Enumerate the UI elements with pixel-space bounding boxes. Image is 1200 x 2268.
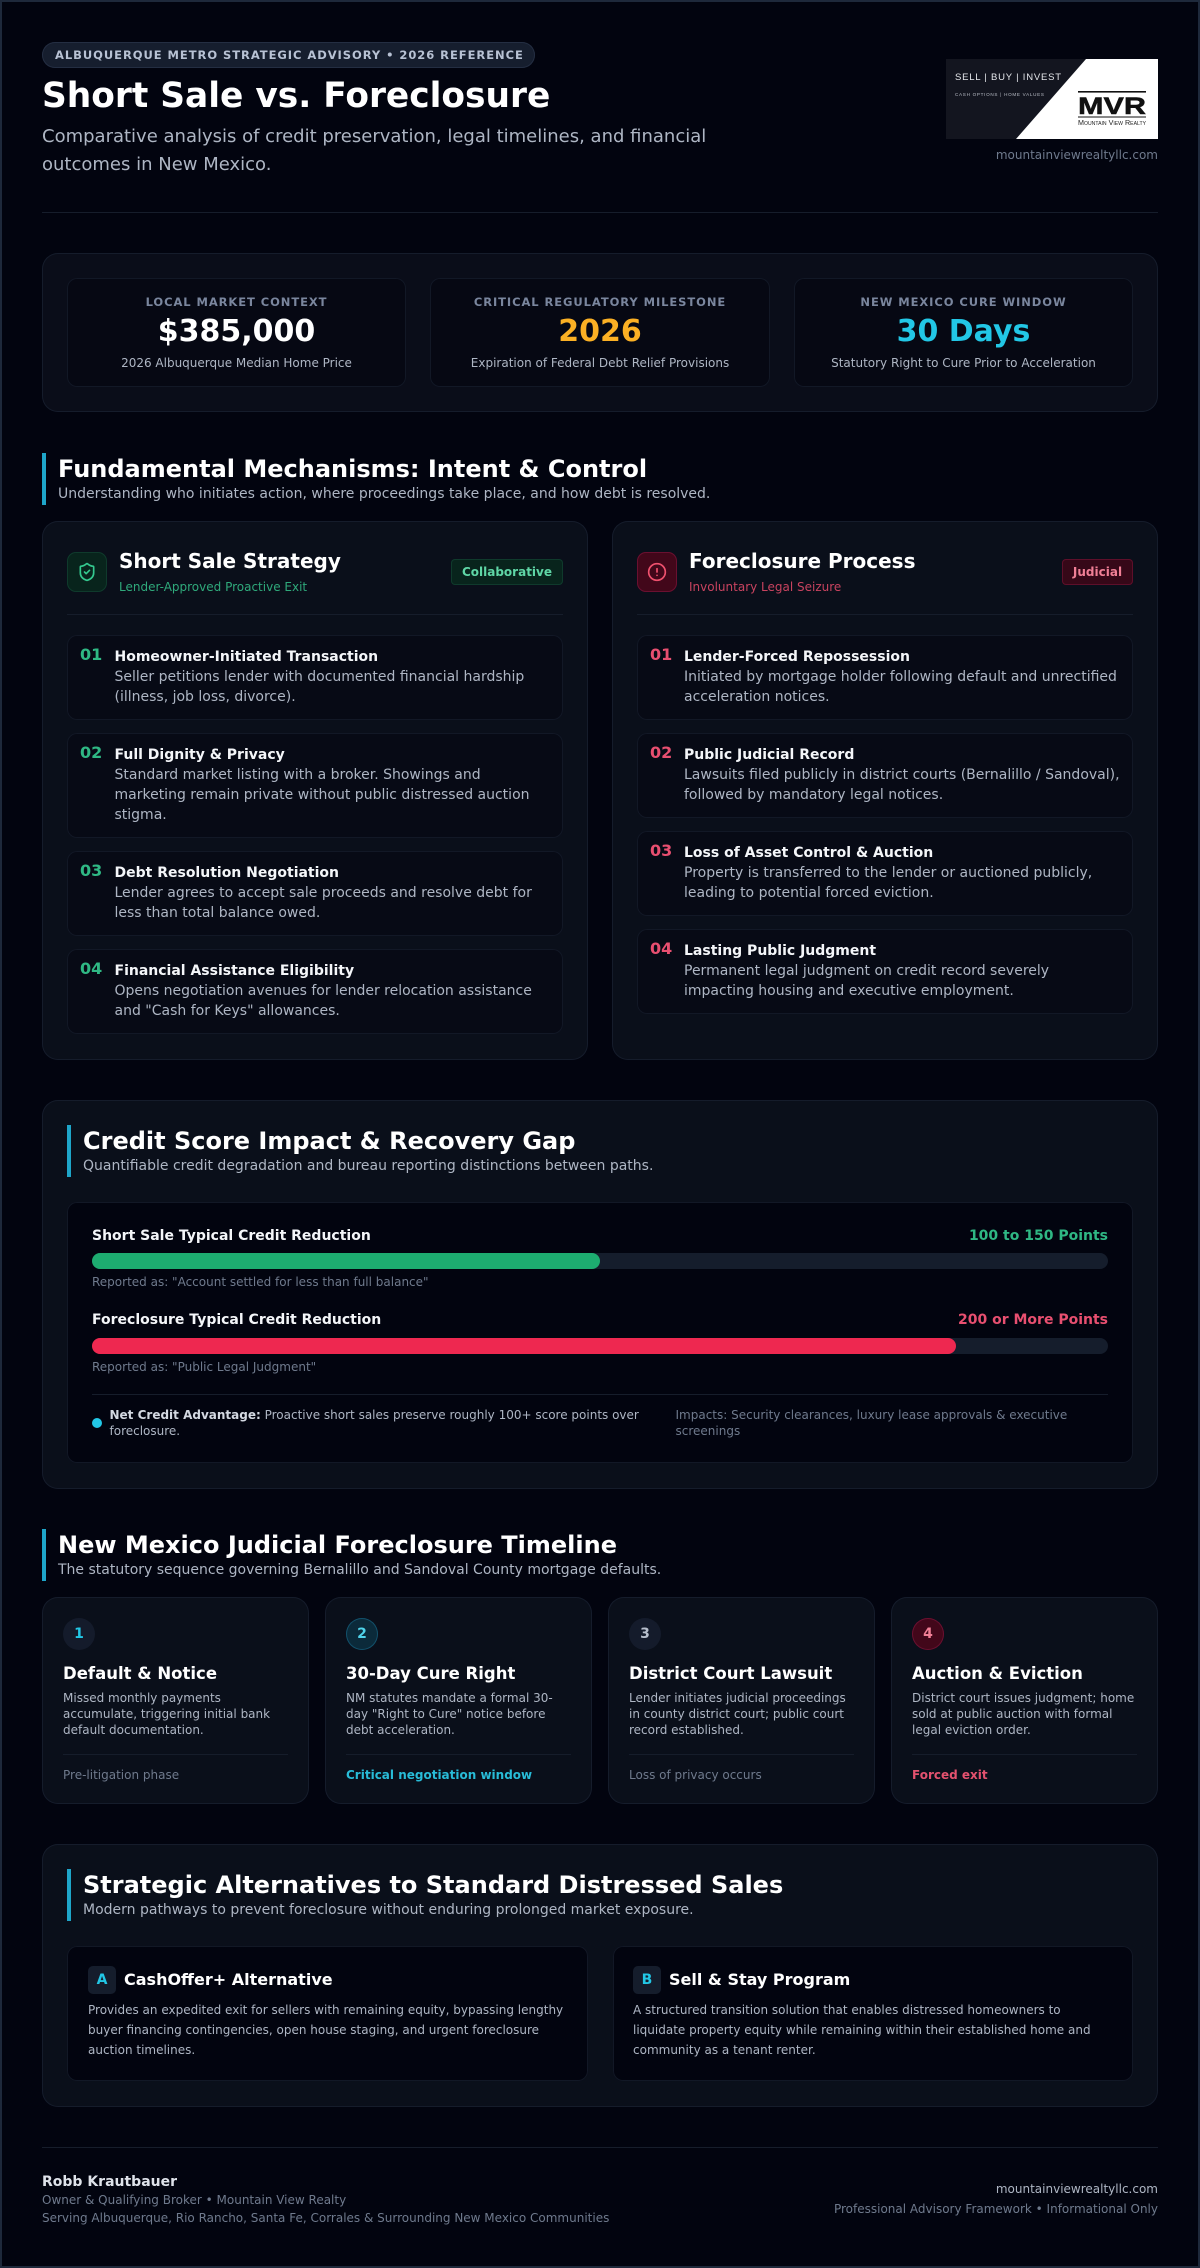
heading — [67, 1125, 653, 1177]
timeline step 4: Forced exit — [912, 1768, 988, 1782]
panel: key stats — [42, 253, 1158, 412]
timeline step 1: Default & Notice — [63, 1664, 217, 1683]
item 04: Lasting Public Judgment — [684, 943, 876, 959]
stat: regulatory milestone — [430, 278, 770, 387]
timeline step 3: District Court Lawsuit — [629, 1664, 832, 1683]
item 01: Lender-Forced Repossession — [684, 649, 910, 665]
item 04: Permanent legal judgment on credit record severely — [684, 963, 1049, 979]
subtitle — [42, 126, 706, 175]
icon: shield check — [67, 552, 107, 592]
item 01 — [637, 635, 1133, 720]
option A: A — [97, 1972, 107, 1988]
section heading: fundamental mechanisms: Fundamental Mechanisms: Intent & Control — [58, 455, 647, 483]
item 03: Loss of Asset Control & Auction — [684, 845, 933, 861]
item 03: less than total balance owed. — [114, 905, 320, 921]
logo: MVR — [1078, 93, 1146, 120]
item 03 — [67, 851, 563, 936]
option A: buyer financing contingencies, open house staging, and urgent foreclosure — [88, 2023, 539, 2037]
stat: regulatory milestone: CRITICAL REGULATORY MILESTONE — [474, 295, 726, 309]
timeline step 3 — [608, 1597, 875, 1804]
item 01: (illness, job loss, divorce). — [114, 689, 296, 705]
broker details: Serving Albuquerque, Rio Rancho, Santa Fe, Corrales & Surrounding New Mexico Communities — [42, 2211, 609, 2225]
timeline step 4: District court issues judgment; home — [912, 1691, 1134, 1705]
stat: cure window — [794, 278, 1133, 387]
item 02 — [637, 733, 1133, 818]
bar: short sale: Short Sale Typical Credit Reduction — [92, 1228, 371, 1244]
timeline step 4: sold at public auction with formal — [912, 1707, 1112, 1721]
broker details — [42, 2193, 609, 2225]
item 02: 02 — [650, 743, 672, 762]
logo: CASH OPTIONS | HOME VALUES — [955, 92, 1044, 97]
item 02: 02 — [80, 743, 102, 762]
item 02: stigma. — [114, 807, 167, 823]
option B: Sell & Stay Program — [669, 1970, 850, 1989]
heading: Modern pathways to prevent foreclosure without enduring prolonged market exposure. — [83, 1902, 694, 1918]
section heading: timeline — [42, 1529, 661, 1581]
item 02: Public Judicial Record — [684, 747, 854, 763]
callout: net credit advantage — [92, 1408, 639, 1438]
heading: Strategic Alternatives to Standard Distressed Sales — [83, 1871, 783, 1899]
section heading: fundamental mechanisms — [42, 453, 710, 505]
item 03: 03 — [80, 861, 102, 880]
panel: foreclosure process — [612, 521, 1158, 1060]
item 02: Lawsuits filed publicly in district courts (Bernalillo / Sandoval), — [684, 767, 1120, 783]
footer right: mountainviewrealtyllc.com — [996, 2182, 1158, 2196]
stat: market context: 2026 Albuquerque Median Home Price — [121, 356, 352, 370]
timeline step 2: debt acceleration. — [346, 1723, 455, 1737]
stat: cure window: NEW MEXICO CURE WINDOW — [860, 295, 1067, 309]
website: mountainviewrealtyllc.com — [996, 148, 1158, 162]
heading: Quantifiable credit degradation and bureau reporting distinctions between paths. — [83, 1158, 653, 1174]
timeline step 2 — [325, 1597, 592, 1804]
item 03: 03 — [650, 841, 672, 860]
item 01: acceleration notices. — [684, 689, 830, 705]
footer right: Professional Advisory Framework • Informational Only — [834, 2202, 1158, 2216]
bar: short sale — [92, 1228, 1108, 1289]
bar: foreclosure: Reported as: "Public Legal Judgment" — [92, 1360, 316, 1374]
badge: advisory tag: ALBUQUERQUE METRO STRATEGIC ADVISORY • 2026 REFERENCE — [55, 48, 524, 62]
logo: SELL | BUY | INVEST — [955, 72, 1061, 83]
timeline step 4 — [891, 1597, 1158, 1804]
stat: market context: LOCAL MARKET CONTEXT — [146, 295, 327, 309]
item 03: Lender agrees to accept sale proceeds and resolve debt for — [114, 885, 532, 901]
item 03 — [637, 831, 1133, 916]
timeline step 4: 4 — [923, 1626, 933, 1642]
section heading: timeline: New Mexico Judicial Foreclosure Timeline — [58, 1531, 617, 1559]
bar: foreclosure — [92, 1312, 1108, 1374]
item 02: Standard market listing with a broker. Showings and — [114, 767, 481, 783]
stat: regulatory milestone: 2026 — [558, 314, 642, 349]
note: impacts — [676, 1408, 1067, 1438]
item 01: 01 — [80, 645, 102, 664]
bar: short sale: Reported as: "Account settled for less than full balance" — [92, 1275, 429, 1289]
option A: auction timelines. — [88, 2043, 195, 2057]
section heading: fundamental mechanisms: Understanding who initiates action, where proceedings take place, and how debt is resolved. — [58, 486, 710, 502]
footer — [42, 2174, 1158, 2225]
item 01: Initiated by mortgage holder following default and unrectified — [684, 669, 1117, 685]
option B — [613, 1946, 1133, 2081]
heading — [67, 1869, 783, 1921]
callout: net credit advantage: foreclosure. — [110, 1424, 180, 1438]
bar: foreclosure: Foreclosure Typical Credit Reduction — [92, 1312, 381, 1328]
panel: strategic alternatives — [42, 1844, 1158, 2107]
title: Short Sale vs. Foreclosure — [42, 76, 550, 116]
item 02: marketing remain private without public distressed auction — [114, 787, 530, 803]
timeline step 1: default documentation. — [63, 1723, 204, 1737]
item 04: impacting housing and executive employment. — [684, 983, 1014, 999]
option A: CashOffer+ Alternative — [124, 1970, 333, 1989]
item 02: followed by mandatory legal notices. — [684, 787, 943, 803]
item 03: Property is transferred to the lender or auctioned publicly, — [684, 865, 1092, 881]
bar: foreclosure: 200 or More Points — [958, 1312, 1108, 1328]
panel: credit score impact — [42, 1100, 1158, 1489]
footer right — [834, 2182, 1158, 2216]
subtitle: outcomes in New Mexico. — [42, 154, 271, 175]
callout: net credit advantage: Net Credit Advantage: Proactive short sales preserve roughly 100+ score points over — [110, 1408, 639, 1422]
item 04: Opens negotiation avenues for lender relocation assistance — [114, 983, 532, 999]
option A: Provides an expedited exit for sellers with remaining equity, bypassing lengthy — [88, 2003, 563, 2017]
timeline step 3: Loss of privacy occurs — [629, 1768, 762, 1782]
badge: judicial — [1062, 559, 1133, 585]
timeline step 2: Critical negotiation window — [346, 1768, 532, 1782]
panel: short sale strategy — [42, 521, 588, 1060]
option B: B — [642, 1972, 652, 1988]
stat: cure window: 30 Days — [897, 314, 1030, 349]
timeline step 4: Auction & Eviction — [912, 1664, 1083, 1683]
stat: market context — [67, 278, 406, 387]
item 04: and "Cash for Keys" allowances. — [114, 1003, 340, 1019]
broker details: Owner & Qualifying Broker • Mountain View Realty — [42, 2193, 346, 2207]
timeline step 1: Pre-litigation phase — [63, 1768, 179, 1782]
item 04 — [67, 949, 563, 1034]
timeline step 3: in county district court; public court — [629, 1707, 844, 1721]
stat: cure window: Statutory Right to Cure Prior to Acceleration — [831, 356, 1096, 370]
item 01: 01 — [650, 645, 672, 664]
item 03: Debt Resolution Negotiation — [114, 865, 339, 881]
timeline step 3: record established. — [629, 1723, 744, 1737]
timeline step 2: NM statutes mandate a formal 30- — [346, 1691, 553, 1705]
badge: collaborative: Collaborative — [462, 565, 552, 579]
note: impacts: screenings — [676, 1424, 740, 1438]
subtitle: Comparative analysis of credit preservation, legal timelines, and financial — [42, 126, 706, 147]
bar: short sale: 100 to 150 Points — [969, 1228, 1108, 1244]
option B: A structured transition solution that enables distressed homeowners to — [633, 2003, 1061, 2017]
timeline step 2: 2 — [357, 1626, 367, 1642]
item 04: 04 — [650, 939, 672, 958]
note: impacts: Impacts: Security clearances, luxury lease approvals & executive — [676, 1408, 1067, 1422]
logo — [946, 59, 1158, 139]
timeline step 3: Lender initiates judicial proceedings — [629, 1691, 846, 1705]
option A — [67, 1946, 588, 2081]
card subtitle: Involuntary Legal Seizure — [689, 580, 841, 594]
item 04: 04 — [80, 959, 102, 978]
item 03: leading to potential forced eviction. — [684, 885, 934, 901]
timeline step 2: day "Right to Cure" notice before — [346, 1707, 545, 1721]
card title: Foreclosure Process — [689, 549, 916, 573]
badge: collaborative — [451, 559, 563, 585]
logo: Mountain View Realty — [1078, 120, 1147, 127]
timeline step 4: legal eviction order. — [912, 1723, 1031, 1737]
option B: community as a tenant renter. — [633, 2043, 816, 2057]
broker name: Robb Krautbauer — [42, 2174, 177, 2190]
timeline step 1: 1 — [74, 1626, 84, 1642]
timeline step 2: 30-Day Cure Right — [346, 1664, 515, 1683]
item 04: Financial Assistance Eligibility — [114, 963, 354, 979]
badge: judicial: Judicial — [1073, 565, 1122, 579]
header — [42, 42, 1158, 175]
stat: market context: $385,000 — [158, 314, 315, 349]
section heading: timeline: The statutory sequence governing Bernalillo and Sandoval County mortgage defaults. — [58, 1562, 661, 1578]
card subtitle: Lender-Approved Proactive Exit — [119, 580, 307, 594]
badge: advisory tag — [42, 42, 535, 68]
item 01: Homeowner-Initiated Transaction — [114, 649, 378, 665]
item 01: Seller petitions lender with documented financial hardship — [114, 669, 524, 685]
chart: credit reduction bars — [67, 1202, 1133, 1463]
item 02: Full Dignity & Privacy — [114, 747, 285, 763]
timeline step 1 — [42, 1597, 309, 1804]
timeline step 3: 3 — [640, 1626, 650, 1642]
stat: regulatory milestone: Expiration of Federal Debt Relief Provisions — [471, 356, 729, 370]
item 04 — [637, 929, 1133, 1014]
timeline step 1: Missed monthly payments — [63, 1691, 221, 1705]
item 01 — [67, 635, 563, 720]
icon: alert circle — [637, 552, 677, 592]
option B: liquidate property equity while remaining within their established home and — [633, 2023, 1091, 2037]
heading: Credit Score Impact & Recovery Gap — [83, 1127, 575, 1155]
card title: Short Sale Strategy — [119, 549, 341, 573]
item 02 — [67, 733, 563, 838]
timeline step 1: accumulate, triggering initial bank — [63, 1707, 270, 1721]
